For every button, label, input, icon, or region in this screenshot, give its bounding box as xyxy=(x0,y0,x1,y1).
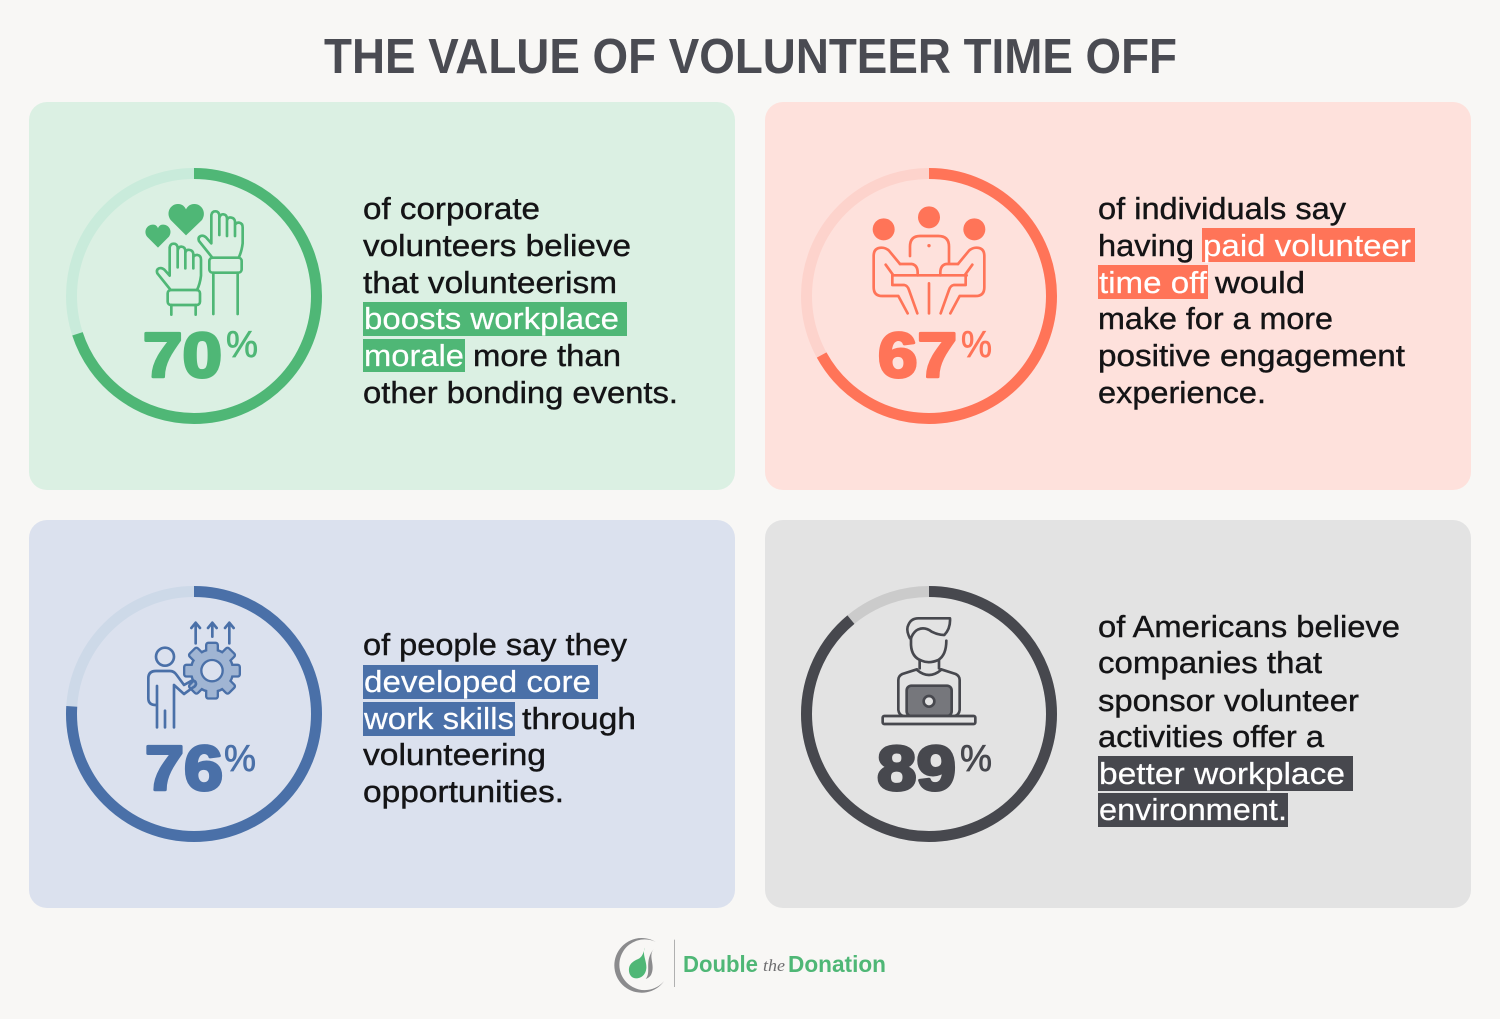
logo wordmark xyxy=(683,951,886,977)
donut ring: 89% xyxy=(806,592,1052,836)
text block: morale statistic: morale xyxy=(364,338,464,373)
text block: engagement statistic: positive engagement xyxy=(1098,338,1405,373)
stat: 89%: % xyxy=(960,738,992,779)
text block: work skills statistic: of people say they xyxy=(363,627,628,662)
stat: 76%: 76 xyxy=(145,734,223,804)
logo: Double the Donation xyxy=(609,935,886,998)
panel: individuals 67% xyxy=(765,102,1471,490)
stat: 67%: 67 xyxy=(878,321,957,391)
text block: workplace environment statistic: better workplace xyxy=(1099,756,1345,791)
text block: morale statistic: of corporate xyxy=(363,191,540,226)
stat: 89%: 89 xyxy=(877,734,956,804)
logo mark xyxy=(609,935,675,998)
title: THE VALUE OF VOLUNTEER TIME OFF xyxy=(324,30,1177,84)
text block: morale statistic xyxy=(363,191,678,410)
text block: engagement statistic: time off xyxy=(1099,265,1207,300)
text block: workplace environment statistic: companies that xyxy=(1098,645,1322,680)
stat: 89% xyxy=(877,734,992,804)
logo wordmark: Donation xyxy=(788,951,886,977)
stat: 76% xyxy=(145,734,256,804)
text block: workplace environment statistic: sponsor volunteer xyxy=(1098,683,1359,718)
stat: 76%: % xyxy=(224,738,256,779)
text block: work skills statistic: opportunities. xyxy=(363,774,564,809)
text block: morale statistic: boosts workplace xyxy=(364,301,619,336)
text block: morale statistic: more than xyxy=(473,338,621,373)
text block: engagement statistic: make for a more xyxy=(1098,301,1333,336)
logo wordmark: the xyxy=(763,956,785,975)
logo wordmark: Double xyxy=(683,951,758,977)
panel: Americans 89% xyxy=(765,520,1471,908)
panel: corporate volunteers 70% xyxy=(29,102,735,490)
icon: person at a laptop xyxy=(883,618,975,724)
donut ring: 76% xyxy=(72,592,316,836)
stat: 67%: % xyxy=(961,324,992,365)
stat: 67% xyxy=(878,321,992,391)
text block: engagement statistic: having xyxy=(1098,228,1194,263)
text block: work skills statistic: through xyxy=(522,701,636,736)
stat: 70%: 70 xyxy=(143,321,222,391)
text block: workplace environment statistic: activities offer a xyxy=(1098,719,1325,754)
icon: people meeting at a table xyxy=(873,206,985,313)
text block: engagement statistic: paid volunteer xyxy=(1203,228,1411,263)
stat: 70% xyxy=(143,321,258,391)
text block: work skills statistic: volunteering xyxy=(363,737,546,772)
text block: work skills statistic: work skills xyxy=(363,701,514,736)
stat: 70%: % xyxy=(226,324,258,365)
text block: engagement statistic xyxy=(1098,191,1415,410)
text block: workplace environment statistic xyxy=(1098,609,1400,827)
icon: person turning a gear xyxy=(148,623,239,727)
panel: work skills 76% xyxy=(29,520,735,908)
text block: workplace environment statistic: of Americans believe xyxy=(1098,609,1400,644)
text block: engagement statistic: would xyxy=(1214,265,1305,300)
text block: engagement statistic: of individuals say xyxy=(1098,191,1347,226)
text block: morale statistic: volunteers believe xyxy=(363,228,631,263)
donut ring: 70% xyxy=(72,174,316,418)
text block: morale statistic: other bonding events. xyxy=(363,375,678,410)
donut ring: 67% xyxy=(806,174,1052,418)
text block: work skills statistic: developed core xyxy=(364,664,591,699)
text block: engagement statistic: experience. xyxy=(1098,375,1266,410)
text block: morale statistic: that volunteerism xyxy=(363,265,617,300)
text block: work skills statistic xyxy=(363,627,636,809)
text block: workplace environment statistic: environment. xyxy=(1099,792,1287,827)
icon: raised hands and hearts xyxy=(145,204,243,315)
